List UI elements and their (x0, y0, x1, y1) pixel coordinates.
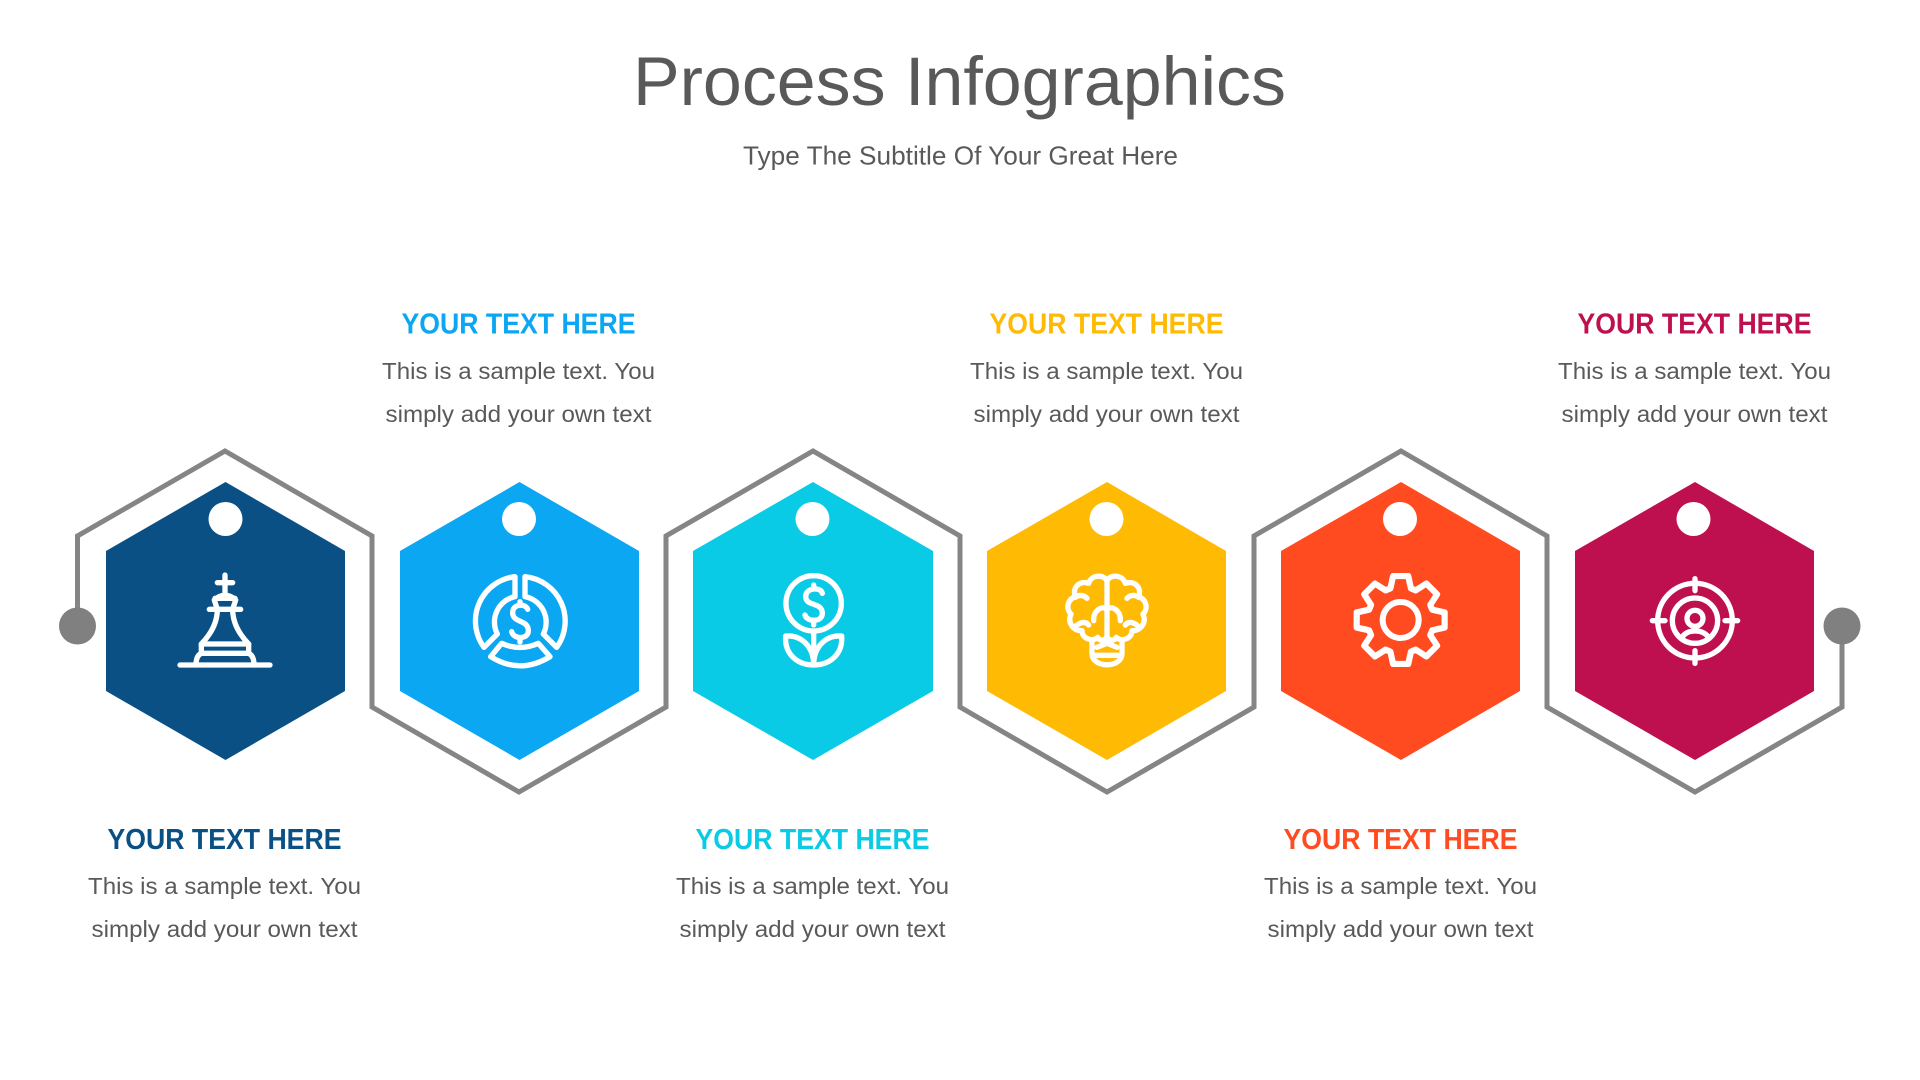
step 4 text: This is a sample text. You (970, 358, 1243, 384)
step 5 text: simply add your own text (1268, 916, 1534, 942)
step 3 text: simply add your own text (680, 916, 946, 942)
step 1 text: This is a sample text. You (88, 873, 361, 899)
step 5 text: This is a sample text. You (1264, 873, 1537, 899)
hexagon 1: navy (106, 482, 345, 760)
hexagon 3: cyan (693, 482, 933, 760)
icon: chess king (180, 575, 270, 665)
icon: brain bulb (1068, 576, 1146, 665)
step 3 text: YOUR TEXT HERE (696, 824, 930, 856)
step 3 text: This is a sample text. You (676, 873, 949, 899)
title: Process Infographics (633, 43, 1286, 120)
step 4 text: YOUR TEXT HERE (990, 308, 1224, 340)
step 6 text: simply add your own text (1562, 401, 1828, 427)
step 2 text: simply add your own text (386, 401, 652, 427)
step 4 text (970, 308, 1243, 427)
step 2 text: This is a sample text. You (382, 358, 655, 384)
step 1 text: simply add your own text (92, 916, 358, 942)
step 5 text: YOUR TEXT HERE (1284, 824, 1518, 856)
step 6 text (1558, 308, 1831, 427)
step 1 text: YOUR TEXT HERE (108, 824, 342, 856)
step 6 text: YOUR TEXT HERE (1578, 308, 1812, 340)
step 6 text: This is a sample text. You (1558, 358, 1831, 384)
connector line (78, 451, 1842, 792)
icon: money plant (786, 576, 842, 665)
left end dot (59, 608, 96, 644)
hexagon 5: orange (1281, 482, 1520, 760)
hexagon 4: amber (987, 482, 1226, 760)
icon: gear (1357, 576, 1445, 664)
step 2 text: YOUR TEXT HERE (402, 308, 636, 340)
right end dot (1824, 608, 1860, 644)
step 1 text (88, 824, 361, 942)
hexagon 6: crimson (1575, 482, 1814, 760)
step 5 text (1264, 824, 1537, 942)
step 3 text (676, 824, 949, 942)
hexagon 2: blue (400, 482, 639, 760)
subtitle: Type The Subtitle Of Your Great Here (743, 140, 1178, 170)
icon: dollar pie chart (475, 577, 565, 666)
step 2 text (382, 308, 655, 427)
icon: target person (1652, 579, 1738, 663)
step 4 text: simply add your own text (974, 401, 1240, 427)
